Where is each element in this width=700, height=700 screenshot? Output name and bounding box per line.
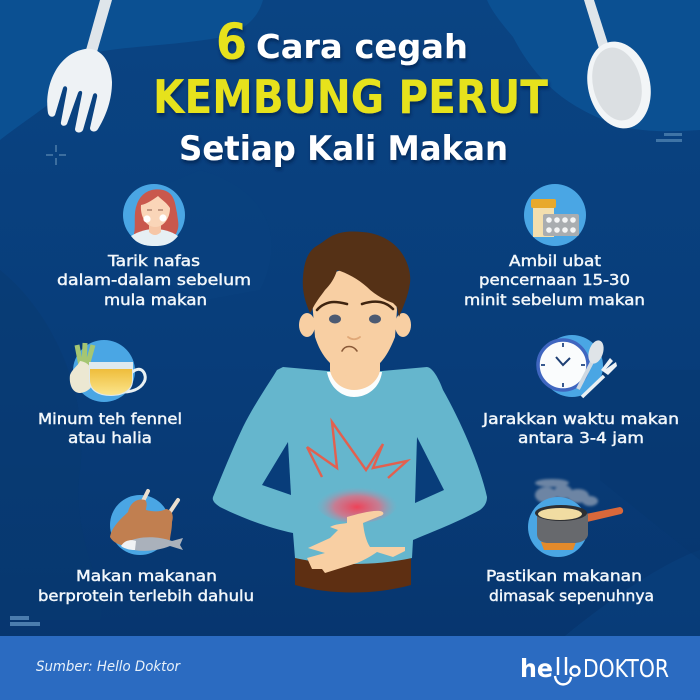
text: step 6: Pastikan makanan xyxy=(486,567,642,585)
decorative mark: top right lines xyxy=(656,133,682,142)
icon: medicine xyxy=(524,184,586,246)
text: step 6: dimasak sepenuhnya xyxy=(489,587,654,605)
text: step 2: atau halia xyxy=(68,429,152,447)
character: man with bloated stomach xyxy=(213,232,487,592)
text: step 5: antara 3-4 jam xyxy=(518,429,644,447)
text: step 4: pencernaan 15-30 xyxy=(479,271,630,289)
ears xyxy=(299,313,411,337)
title: 6 xyxy=(216,13,247,71)
title: Cara cegah xyxy=(256,27,468,66)
icon: fennel and tea xyxy=(70,340,145,402)
footer band xyxy=(0,636,700,700)
nose and mouth xyxy=(348,337,360,339)
text: step 1: Tarik nafas xyxy=(107,252,200,270)
trousers xyxy=(295,556,411,592)
icon: cooking pot xyxy=(528,479,623,557)
eyes xyxy=(329,314,381,324)
text: step 3 xyxy=(38,567,254,605)
left arm gap xyxy=(262,442,291,495)
decorative mark: bottom left lines xyxy=(10,616,40,626)
logo: helloDOKTOR xyxy=(520,654,669,684)
decorative mark: crosshair xyxy=(46,145,66,165)
text: step 2: Minum teh fennel xyxy=(38,410,182,428)
icon: spoon xyxy=(579,0,659,135)
pain burst xyxy=(307,422,407,478)
hands xyxy=(307,511,405,573)
text: step 3: berprotein terlebih dahulu xyxy=(38,587,254,605)
logo: helloDOKTOR: he xyxy=(520,654,553,683)
text: step 1: dalam-dalam sebelum xyxy=(57,271,251,289)
text: step 1: mula makan xyxy=(104,291,207,309)
title: Setiap Kali Makan xyxy=(179,129,508,169)
text: step 4: Ambil ubat xyxy=(509,252,601,270)
text: step 1 xyxy=(57,252,251,309)
title: KEMBUNG PERUT xyxy=(153,70,549,124)
text: step 4: minit sebelum makan xyxy=(464,291,645,309)
pain glow xyxy=(316,483,398,523)
icon: clock and cutlery xyxy=(538,335,617,397)
text: step 5 xyxy=(482,410,679,447)
hair xyxy=(303,232,410,317)
text: step 6 xyxy=(486,567,654,605)
neck xyxy=(330,355,380,390)
text: step 4 xyxy=(464,252,645,309)
eyebrows xyxy=(317,302,393,310)
right arm gap xyxy=(415,437,444,503)
text: step 3: Makan makanan xyxy=(76,567,217,585)
logo: helloDOKTOR: DOKTOR xyxy=(583,654,669,683)
source text: Sumber: Hello Doktor xyxy=(36,659,181,675)
icon: chicken and fish xyxy=(110,491,183,555)
text: step 5: Jarakkan waktu makan xyxy=(482,410,679,428)
icon: deep breathing woman xyxy=(123,184,185,246)
text: step 2 xyxy=(38,410,182,447)
collar xyxy=(327,372,382,397)
title xyxy=(153,13,549,169)
icon: fork xyxy=(47,0,112,133)
face xyxy=(312,268,397,377)
sweater xyxy=(213,367,487,564)
